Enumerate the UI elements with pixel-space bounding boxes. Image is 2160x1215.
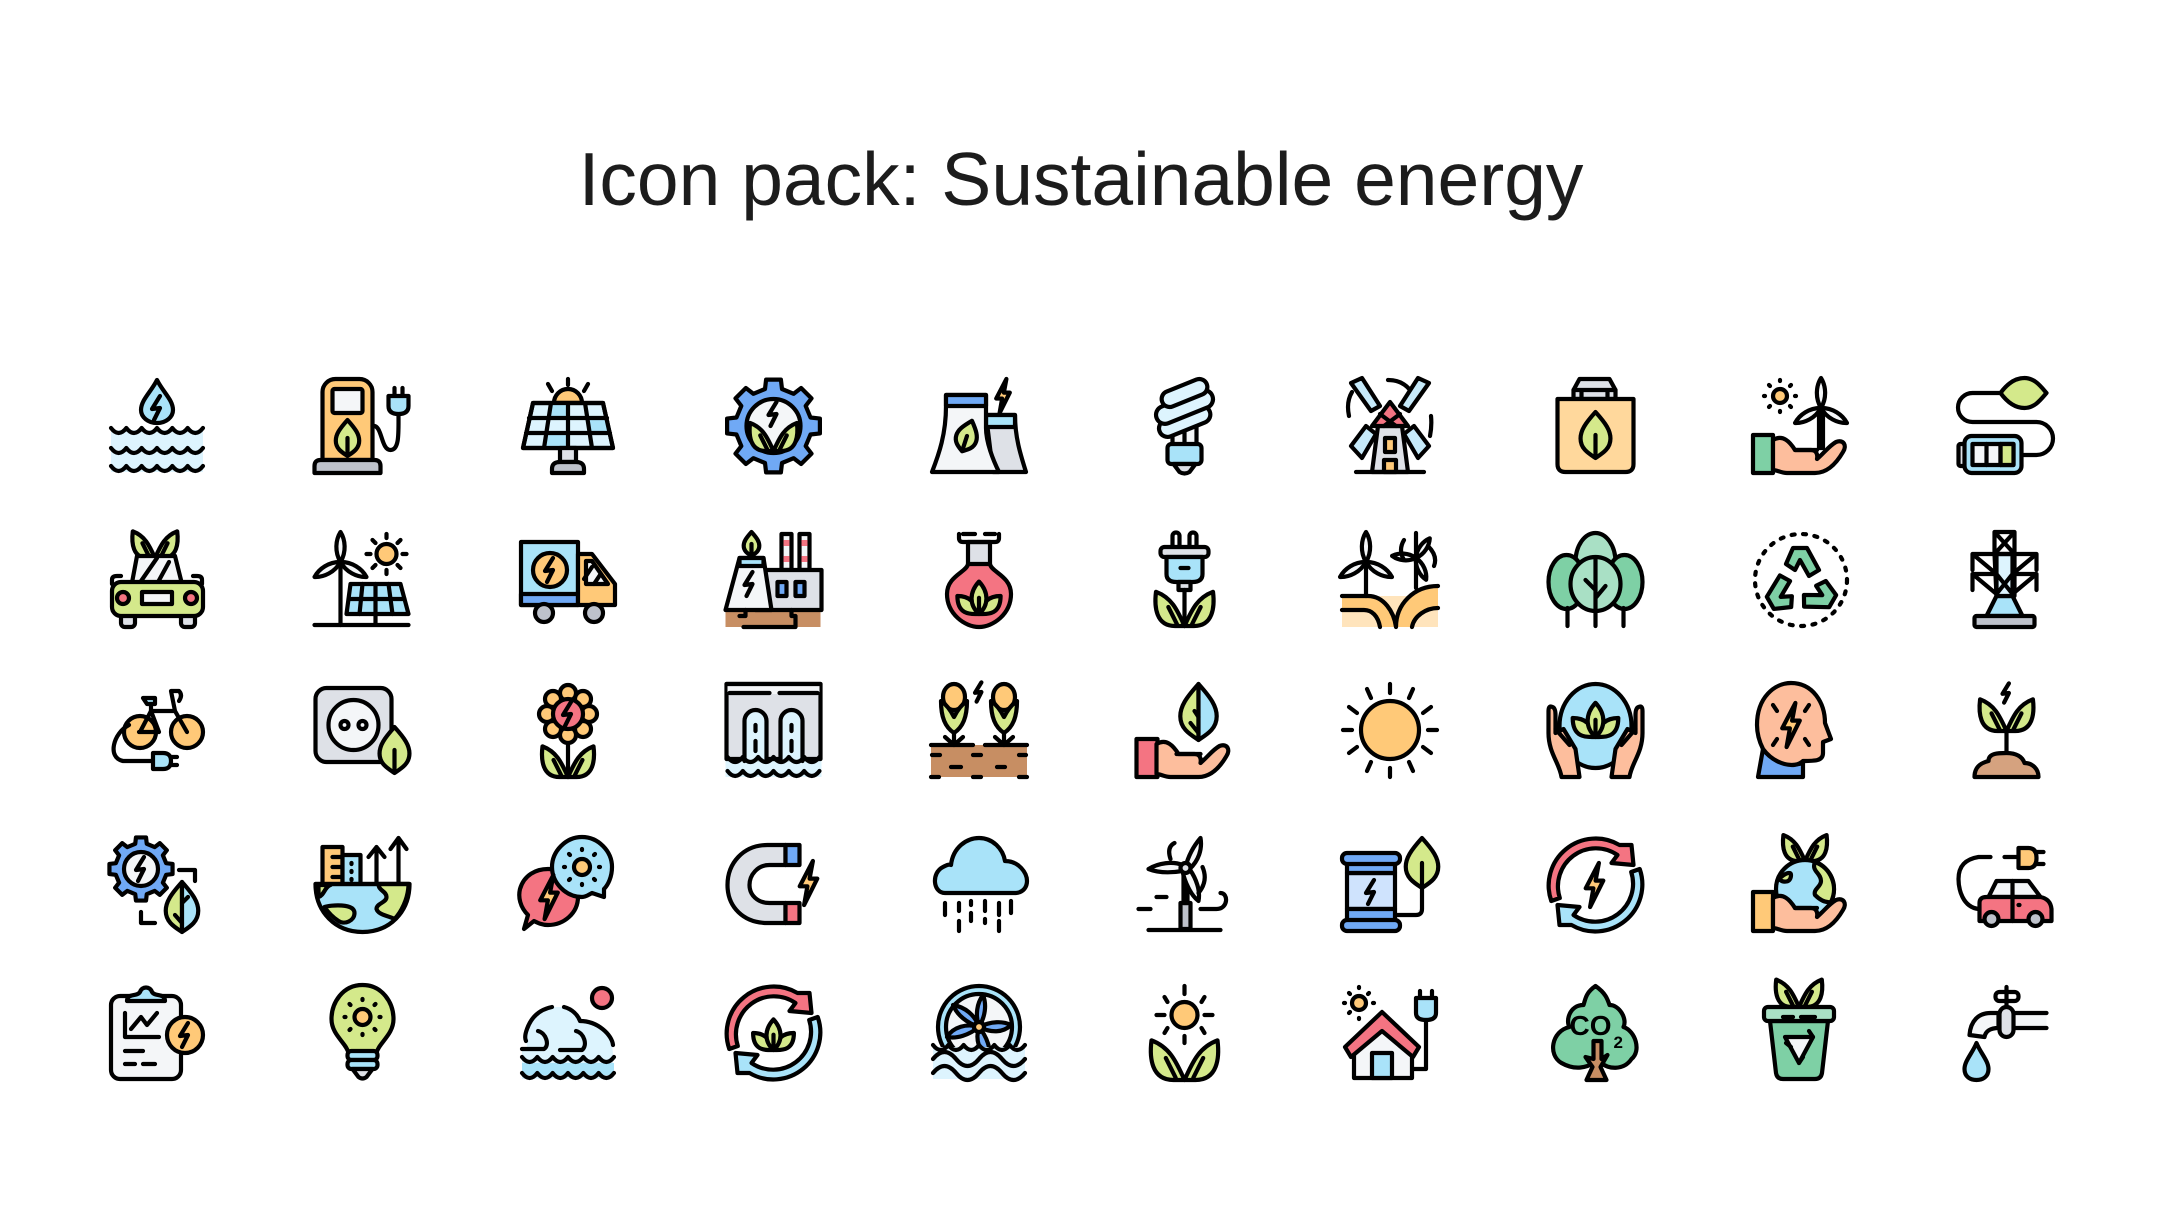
icon: tidal wave xyxy=(522,988,614,1079)
icon: compact fluorescent bulb xyxy=(1153,377,1216,474)
icon: rain cloud xyxy=(935,838,1027,931)
icon: CO2 tree: 2 xyxy=(1614,1033,1623,1052)
icon: electric car and plug xyxy=(1958,848,2052,926)
icon: electric bicycle xyxy=(114,691,203,769)
icon: battery and leaf xyxy=(1958,378,2053,473)
icon: hydroelectric dam xyxy=(726,684,822,777)
icon: light bulb with sun xyxy=(332,985,394,1078)
icon: circular arrows with plant xyxy=(727,987,820,1079)
icon: speech bubbles with sun and bolt xyxy=(519,837,612,929)
icon: plug with sprout xyxy=(1155,532,1214,626)
icon: hand holding earth with plant xyxy=(1753,835,1845,931)
icon: sun xyxy=(1343,684,1437,777)
icon: water drop over waves xyxy=(111,380,203,472)
icon: windmill xyxy=(1348,378,1431,472)
icon: circular arrows with bolt xyxy=(1549,839,1642,931)
icon: wind turbine with wind xyxy=(1138,838,1226,930)
icon: water tap with drop xyxy=(1964,987,2046,1080)
icon: biofuel barrel with leaf xyxy=(1342,838,1438,931)
icon: CO2 tree xyxy=(1553,986,1637,1080)
icon: electric delivery truck xyxy=(521,542,615,622)
icon: solar panel xyxy=(523,379,613,473)
icon: water wheel xyxy=(933,986,1025,1080)
icon: corn crop with bolt xyxy=(931,682,1027,777)
icon: solar powered house with plug xyxy=(1344,987,1436,1078)
icon: magnet with bolt xyxy=(728,845,817,923)
icon: electricity pylon xyxy=(1972,532,2036,627)
icon: recycling symbol in dashed circle xyxy=(1755,534,1847,626)
icon: sun over sprout xyxy=(1151,986,1218,1080)
icon: sunflower xyxy=(539,685,597,777)
icon: hand holding wind turbine xyxy=(1753,378,1849,473)
icon: half globe with city and turbines xyxy=(316,838,410,932)
icon: sprout in soil with bolt xyxy=(1974,683,2038,777)
icon: cooling towers with leaf xyxy=(932,379,1026,472)
icon: flask with plant xyxy=(947,534,1011,627)
icon: CO2 tree: CO xyxy=(1570,1010,1612,1041)
icon: eco shopping bag xyxy=(1558,379,1634,472)
icon: trees xyxy=(1548,533,1642,626)
title: Icon pack: Sustainable energy xyxy=(579,137,1583,221)
icon: EV charging station xyxy=(314,379,408,473)
icon: socket with leaf xyxy=(316,688,409,773)
icon: hands around globe with plant xyxy=(1548,684,1642,777)
icon: head with bolt xyxy=(1757,683,1831,777)
icon: recycling bin with plant xyxy=(1764,980,1834,1079)
icon: green power plant xyxy=(726,532,822,627)
icon: wind turbine, sun and solar panel xyxy=(312,532,408,625)
icon: hand holding leaf xyxy=(1136,684,1228,777)
icon: green electric car xyxy=(112,531,203,627)
icon: wind turbines on hills xyxy=(1338,525,1448,627)
icon: gear and leaf drop xyxy=(109,837,198,932)
icon: clipboard report with bolt xyxy=(111,988,203,1079)
icon: gear with plant xyxy=(727,380,820,472)
